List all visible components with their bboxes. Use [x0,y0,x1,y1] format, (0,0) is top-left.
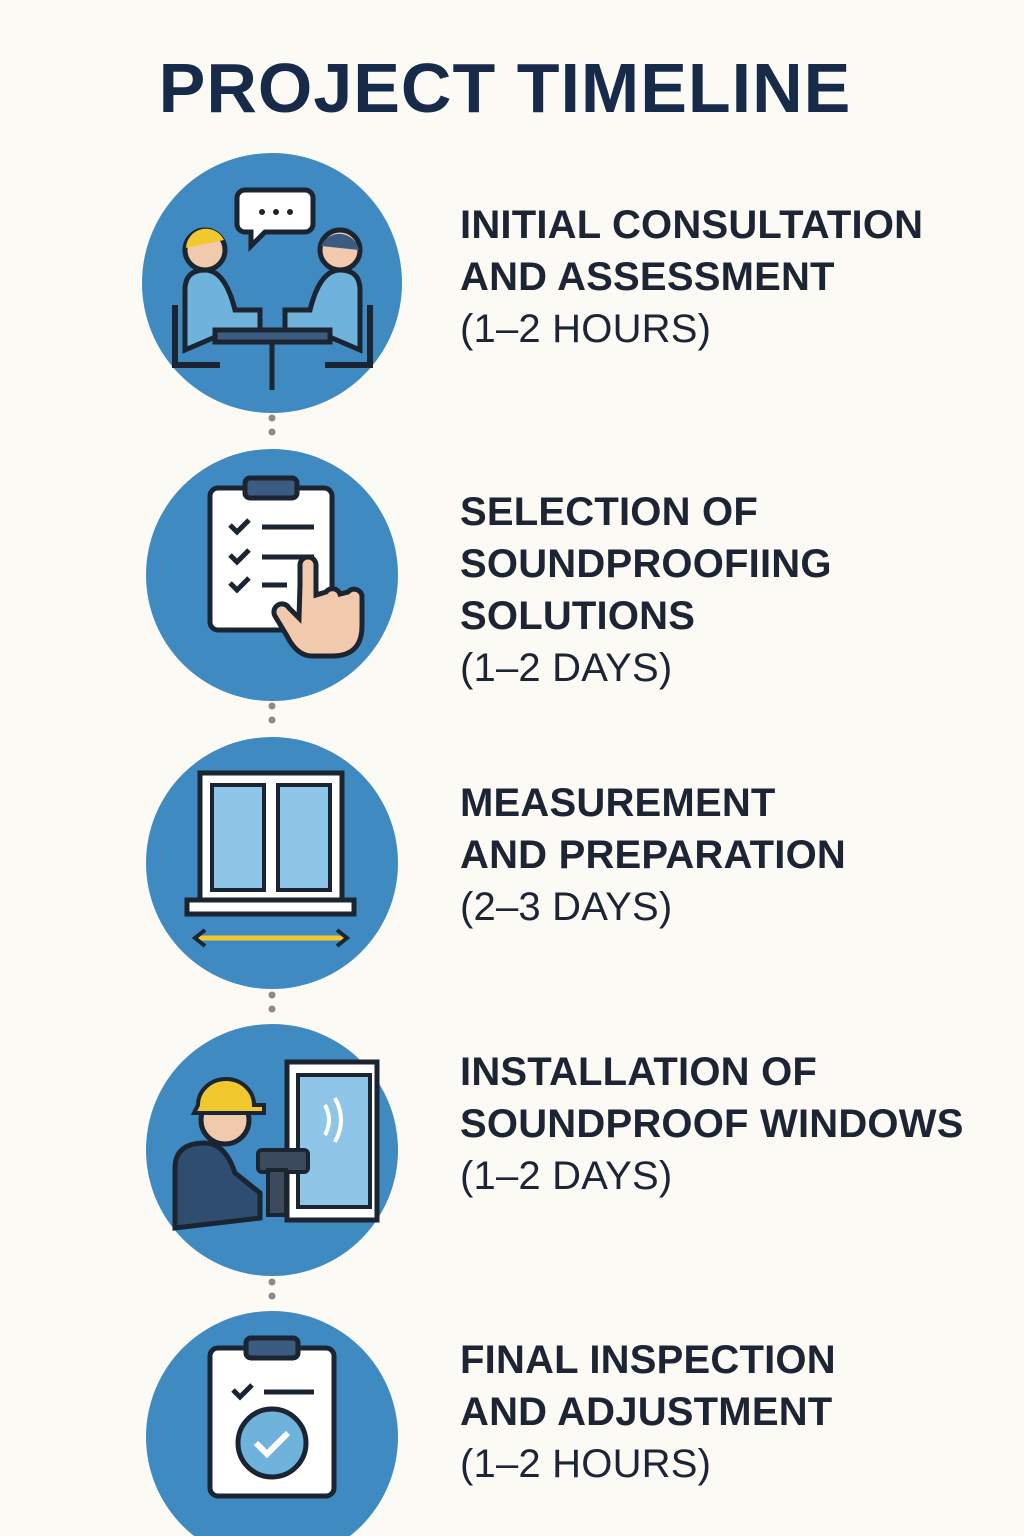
text: step 2: SOUNDPROOFIING [460,542,832,586]
text: step 4: SOUNDPROOF WINDOWS [460,1102,964,1146]
icon: consultation [142,153,402,413]
text: step 4 [460,1050,964,1198]
text: step 5: FINAL INSPECTION [460,1338,836,1382]
text: step 2: (1–2 DAYS) [460,646,672,690]
icon: checklist [146,449,398,701]
icon: window [146,737,398,989]
text: step 2: SOLUTIONS [460,594,695,638]
connector dots [268,414,276,1300]
title: PROJECT TIMELINE [159,49,851,127]
text: step 5: AND ADJUSTMENT [460,1390,832,1434]
text: step 1: AND ASSESSMENT [460,255,835,299]
text: step 3: MEASUREMENT [460,781,776,825]
text: step 1: (1–2 HOURS) [460,307,711,351]
text: step 4: (1–2 DAYS) [460,1154,672,1198]
text: step 2 [460,490,832,690]
text: step 3 [460,781,846,929]
icon: installer [146,1024,398,1276]
text: step 1: INITIAL CONSULTATION [460,203,923,247]
icon: final inspection [146,1311,398,1536]
text: step 5: (1–2 HOURS) [460,1442,711,1486]
text: step 4: INSTALLATION OF [460,1050,817,1094]
text: step 3: (2–3 DAYS) [460,885,672,929]
text: step 5 [460,1338,836,1486]
text: step 3: AND PREPARATION [460,833,846,877]
text: step 1 [460,203,923,351]
text: step 2: SELECTION OF [460,490,758,534]
